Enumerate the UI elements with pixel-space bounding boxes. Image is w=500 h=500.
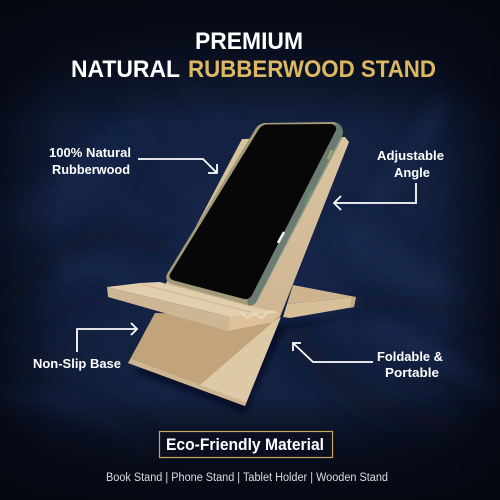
- product: wooden stand with phone: [107, 122, 356, 414]
- rear foot: [283, 285, 356, 318]
- callout: 100% Natural Rubberwood: Rubberwood: [52, 162, 130, 177]
- lower board: [128, 313, 281, 406]
- callout: Foldable & Portable: Portable: [385, 365, 439, 380]
- arrow: [334, 183, 416, 210]
- title: [71, 28, 436, 83]
- callout: 100% Natural Rubberwood: [49, 145, 217, 177]
- arrow: [77, 323, 137, 352]
- callout: Adjustable Angle: Adjustable: [377, 148, 444, 163]
- arrow: [138, 159, 217, 173]
- callout: Non-Slip Base: [33, 323, 137, 371]
- callout: Non-Slip Base: Non-Slip Base: [33, 356, 121, 371]
- badge: Eco-Friendly Material: [160, 432, 332, 458]
- back board: [165, 137, 349, 322]
- callout: Adjustable Angle: Angle: [394, 165, 430, 180]
- shelf: [107, 282, 280, 331]
- footer keywords: Book Stand | Phone Stand | Tablet Holder | Wooden Stand: [106, 472, 388, 484]
- arrow: [293, 343, 373, 362]
- callout: Foldable & Portable: [293, 343, 443, 380]
- stand shadow: [135, 316, 355, 414]
- callout: Adjustable Angle: [334, 148, 444, 210]
- title: RUBBERWOOD STAND: [188, 56, 436, 83]
- title: PREMIUM: [195, 28, 303, 55]
- title: NATURAL: [71, 56, 180, 83]
- phone: [166, 122, 343, 305]
- badge: Eco-Friendly Material: Eco-Friendly Material: [166, 435, 324, 454]
- callout: Foldable & Portable: Foldable &: [377, 349, 443, 364]
- callout: 100% Natural Rubberwood: 100% Natural: [49, 145, 131, 160]
